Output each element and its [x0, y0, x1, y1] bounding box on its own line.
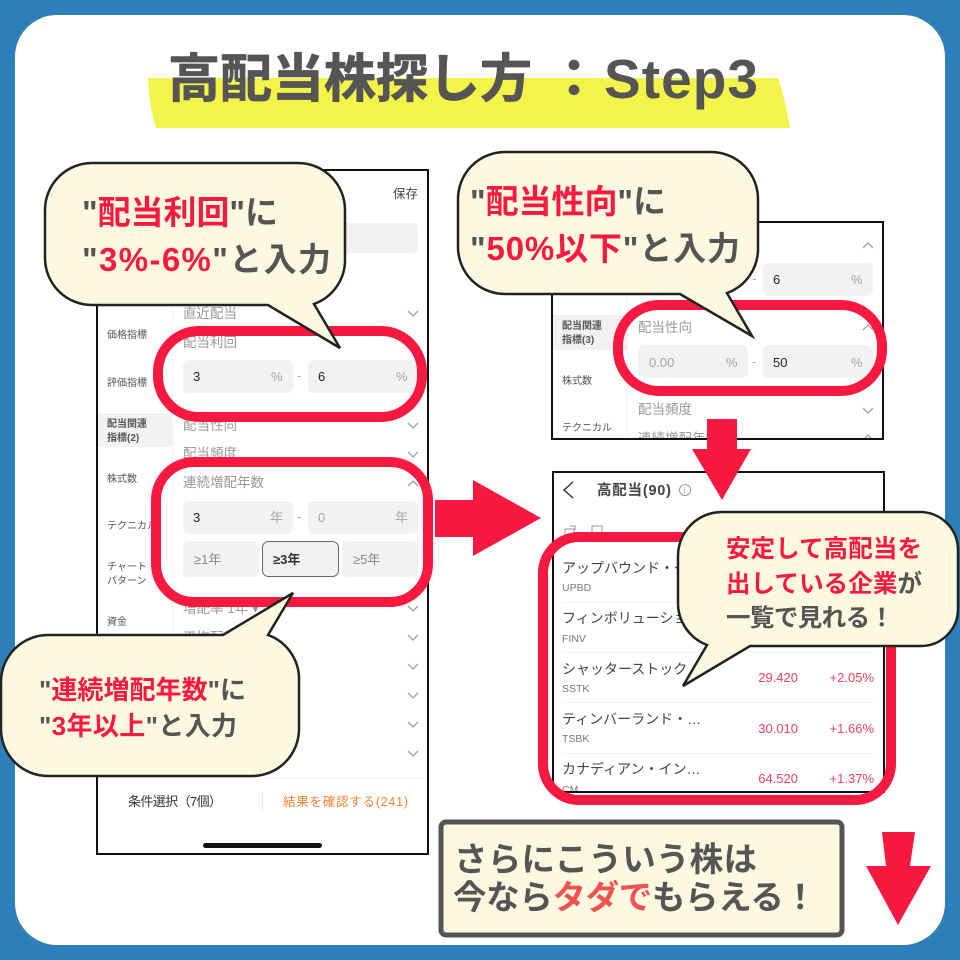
consecutive years inputs: 年 [270, 510, 283, 525]
callout: payout ratio [458, 152, 758, 336]
dividend yield inputs [183, 360, 418, 393]
panel: right top phone screenshot: 0.00 [649, 355, 674, 370]
panel: right top phone screenshot: 連続増配年数 [638, 430, 719, 446]
consecutive years inputs: - [297, 509, 301, 524]
panel: right top phone screenshot: 指標(3) [562, 333, 594, 346]
callout: result list: 一覧で見れる！ [726, 604, 894, 632]
panel: right bottom phone result list: FINV [562, 633, 586, 645]
panel: right top phone screenshot: % [726, 355, 738, 370]
panel: right bottom phone result list: 高配当(90) [597, 481, 671, 499]
callout: dividend yield: "配当利回"に [82, 194, 278, 231]
title text: 高配当株探し方 [168, 51, 532, 109]
sidebar: パターン [107, 575, 146, 587]
panel: right bottom phone result list: +1.66% [830, 721, 874, 736]
sidebar: 指標(2) [107, 431, 139, 444]
filter section headings: 増配率 1年 ▾ [183, 601, 259, 616]
callout: result list: 出している企業が [726, 569, 922, 598]
consecutive years inputs: 年 [395, 510, 408, 525]
sidebar: 配当関連 [107, 417, 147, 430]
panel: right bottom phone result list: 30.010 [758, 721, 798, 736]
panel: right bottom phone result list: SSTK [562, 683, 589, 695]
panel: right bottom phone result list: ティンバーランド・… [562, 711, 701, 727]
panel: right bottom phone result list [553, 472, 884, 796]
panel: right bottom phone result list: +1.37% [830, 771, 874, 786]
filter section headings: 配当性向 [183, 418, 237, 433]
panel: right top phone screenshot: 配当頻度 [638, 402, 692, 417]
title highlight [148, 78, 790, 128]
dividend yield inputs: % [271, 369, 283, 384]
consecutive years inputs [183, 501, 418, 577]
panel: right top phone screenshot: 配当関連 [562, 319, 602, 332]
panel: right top phone screenshot: % [851, 355, 863, 370]
filter section headings [183, 306, 273, 645]
consecutive years inputs: ≥1年 [194, 552, 221, 567]
panel: right top phone screenshot: - [752, 354, 756, 369]
dividend yield inputs: - [297, 368, 301, 383]
callout: result list [678, 512, 958, 686]
sidebar: 評価指標 [107, 376, 147, 389]
panel: right bottom phone result list: カナディアン・イン… [562, 761, 700, 777]
panel: right bottom phone result list: アップバウンド・グ [562, 560, 688, 576]
filter section headings: 配当頻度 [183, 446, 237, 461]
dividend yield inputs: % [396, 369, 408, 384]
sidebar: 資金 [107, 615, 127, 628]
bottom action bar [98, 778, 427, 848]
callout: dividend yield: "3%-6%"と入力 [82, 241, 331, 278]
consecutive years inputs: 3 [193, 510, 200, 525]
title text: Step3 [604, 48, 758, 110]
highlight ring: consecutive years [156, 462, 428, 602]
panel: right bottom phone result list: +2.05% [830, 670, 874, 685]
callout: payout ratio: "50%以下"と入力 [470, 230, 740, 267]
bottom action bar: 結果を確認する(241) [283, 794, 408, 809]
bottom action bar: 条件選択（7個） [128, 794, 222, 809]
sidebar: 価格指標 [107, 328, 147, 341]
arrow: down between phones [692, 419, 751, 500]
panel: right bottom phone result list: 64.520 [758, 771, 798, 786]
filter section headings: 配当利回 [183, 335, 237, 350]
filter section headings: 連続増配年数 [183, 474, 264, 490]
search box [183, 223, 418, 253]
bottom message box: 今ならタダでもらえる！ [453, 879, 817, 917]
bottom message box: さらにこういう株は [454, 842, 757, 879]
filter section headings: 平均配当 3年 ▾ [183, 630, 273, 645]
callout: consecutive years: "3年以上"と入力 [39, 711, 237, 741]
panel: right top phone screenshot: 50 [773, 355, 787, 370]
panel: right top phone screenshot: % [851, 272, 863, 287]
title [148, 48, 790, 128]
callout: consecutive years [1, 593, 299, 776]
consecutive years inputs: ≥3年 [273, 552, 300, 567]
save label: 保存 [393, 187, 418, 201]
panel: right bottom phone result list: フィンボリューショ [562, 610, 687, 626]
callout: result list: 安定して高配当を [726, 535, 922, 563]
panel: right bottom phone result list: シャッターストック [562, 661, 687, 677]
arrow: down bottom right [866, 832, 931, 925]
chevrons [408, 311, 418, 756]
arrow: right [435, 480, 541, 556]
panel: right top phone screenshot: 株式数 [562, 374, 592, 387]
highlight ring: payout ratio [618, 305, 882, 391]
panel: left phone screenshot [97, 170, 428, 854]
consecutive years inputs: ≥5年 [353, 552, 380, 567]
callout: dividend yield [45, 163, 345, 348]
title text: ： [548, 51, 600, 109]
panel: right top phone screenshot: テクニカル [562, 422, 612, 434]
filter section headings: 直近配当 [183, 306, 237, 321]
callout: payout ratio: "配当性向"に [470, 183, 666, 220]
panel: right bottom phone result list: TSBK [562, 733, 589, 745]
highlight ring: dividend yield [158, 331, 422, 417]
panel: right top phone screenshot [552, 222, 883, 446]
sidebar: チャート [107, 561, 147, 573]
sidebar: 株式数 [107, 472, 137, 485]
panel: right bottom phone result list: 29.420 [758, 670, 798, 685]
panel: right bottom phone result list: UPBD [562, 582, 592, 594]
callout: consecutive years: "連続増配年数"に [39, 675, 246, 705]
panel: right top phone screenshot: 配当性向 [638, 320, 692, 335]
dividend yield inputs: 6 [318, 369, 325, 384]
dividend yield inputs: 3 [193, 369, 200, 384]
panel: right top phone screenshot: - [752, 271, 756, 286]
sidebar [98, 300, 172, 775]
consecutive years inputs: 0 [318, 510, 325, 525]
bottom message box [441, 822, 842, 935]
sidebar: テクニカル [107, 520, 157, 532]
highlight ring: result list [543, 537, 891, 800]
panel: right bottom phone result list: CM [562, 784, 578, 796]
panel: right bottom phone result list: i [684, 486, 686, 496]
panel: right top phone screenshot: 6 [773, 272, 780, 287]
